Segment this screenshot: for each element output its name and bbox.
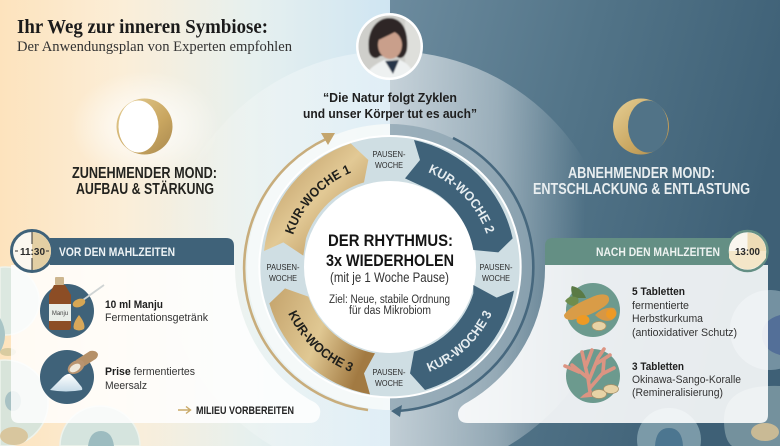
label: Kur-Woche 1: KUR-WOCHE 1: [285, 165, 351, 234]
heading: waxing moon: [72, 165, 217, 198]
text: turmeric: (antioxidativer Schutz): [632, 327, 737, 339]
text: coral: (Remineralisierung): [632, 387, 723, 399]
band behind ring, right side: [390, 124, 533, 410]
icon: coral: [565, 349, 620, 403]
title: Der Anwendungsplan von Experten empfohlen: [17, 39, 293, 55]
icon: Manju bottle and spoon: [40, 277, 104, 338]
clock 11:30: 11:30: [20, 246, 45, 258]
label: pause right: [480, 262, 513, 283]
heading: waxing moon: AUFBAU & STÄRKUNG: [76, 181, 214, 198]
clock 13:00: 13:00: [735, 246, 760, 258]
centre disc: [304, 181, 476, 353]
cycle diagram: [258, 135, 522, 398]
label: pause right: PAUSEN-: [480, 262, 513, 272]
arrow: gold upward arc: [244, 133, 368, 410]
centre text: (mit je 1 Woche Pause): [330, 270, 449, 285]
background halo behind cycle, left half: [163, 51, 390, 446]
centre text: [326, 231, 454, 317]
background: left light side: [0, 0, 390, 446]
arrow and label: prepare milieu: MILIEU VORBEREITEN: [196, 405, 294, 417]
decorative cells, left: [0, 267, 140, 446]
centre text: für das Mikrobiom: [349, 305, 431, 317]
title: Ihr Weg zur inneren Symbiose:: [17, 17, 268, 38]
icon: salt and scoop: [40, 350, 98, 404]
expert quote: “Die Natur folgt Zyklen: [323, 90, 457, 105]
clock 13:00: [728, 231, 768, 271]
text: salt: [105, 366, 195, 392]
label: pause bottom: [372, 367, 406, 388]
panel: after meals: [458, 231, 768, 423]
header bar: before meals: VOR DEN MAHLZEITEN: [59, 247, 175, 259]
portrait of expert: [356, 13, 425, 82]
title: [17, 17, 293, 55]
ring base with pause weeks: [259, 136, 521, 397]
label: Kur-Woche 3 gold: KUR-WOCHE 3: [288, 310, 353, 372]
icon: Manju bottle and spoon: Manju: [52, 311, 68, 317]
text: salt: Prise fermentiertes: [105, 366, 195, 378]
segment: Kur-Woche 2: [405, 140, 513, 252]
header bar: before meals: [50, 238, 234, 265]
header bar: after meals: [545, 238, 750, 265]
text: Manju: 10 ml Manju: [105, 299, 163, 311]
icon: waning moon: [613, 98, 669, 154]
heading: waning moon: [533, 165, 750, 198]
text: Manju: Fermentationsgetränk: [105, 312, 208, 324]
background: right dark side: [390, 0, 780, 446]
band behind ring, left side: [247, 124, 390, 410]
text: coral: 3 Tabletten: [632, 361, 684, 373]
text: turmeric: fermentierte: [632, 300, 689, 312]
glow behind waxing moon: [70, 71, 220, 181]
arrow: blue downward arc: [391, 138, 533, 417]
label: pause top: PAUSEN-: [372, 149, 406, 159]
centre text: 3x WIEDERHOLEN: [326, 251, 454, 270]
text: turmeric: Herbstkurkuma: [632, 313, 704, 325]
text: coral: [632, 361, 741, 399]
label: pause bottom: PAUSEN-: [372, 367, 406, 377]
label: pause left: [266, 262, 300, 283]
segment: Kur-Woche 3 blue: [410, 285, 514, 390]
label: pause left: PAUSEN-: [266, 262, 300, 272]
text: Manju: [105, 299, 208, 324]
segment: Kur-Woche 3 gold: [269, 288, 375, 394]
label: pause top: WOCHE: [375, 160, 403, 170]
label: Kur-Woche 3 blue: KUR-WOCHE 3: [426, 310, 492, 372]
label: pause right: WOCHE: [482, 273, 510, 283]
expert quote: und unser Körper tut es auch”: [303, 106, 477, 121]
label: Kur-Woche 2: KUR-WOCHE 2: [428, 164, 494, 234]
label: pause left: WOCHE: [269, 273, 297, 283]
label: pause bottom: WOCHE: [375, 378, 403, 388]
segment: Kur-Woche 1: [264, 143, 368, 256]
icon: turmeric: [564, 283, 620, 337]
icon: waxing moon: [116, 98, 172, 154]
text: coral: Okinawa-Sango-Koralle: [632, 374, 741, 386]
panel: before meals: [11, 230, 320, 423]
heading: waxing moon: ZUNEHMENDER MOND:: [72, 165, 217, 182]
background halo behind cycle, right half: [390, 51, 617, 446]
text: turmeric: 5 Tabletten: [632, 286, 685, 298]
centre text: Ziel: Neue, stabile Ordnung: [329, 294, 450, 306]
centre text: DER RHYTHMUS:: [328, 231, 453, 250]
clock 11:30: [12, 230, 52, 272]
text: turmeric: [632, 286, 737, 339]
header bar: after meals: NACH DEN MAHLZEITEN: [596, 247, 720, 259]
text: salt: Meersalz: [105, 380, 147, 392]
expert quote: [303, 90, 477, 121]
heading: waning moon: ABNEHMENDER MOND:: [568, 165, 715, 182]
decorative cells, right: [637, 290, 780, 446]
label: pause top: [372, 149, 406, 170]
